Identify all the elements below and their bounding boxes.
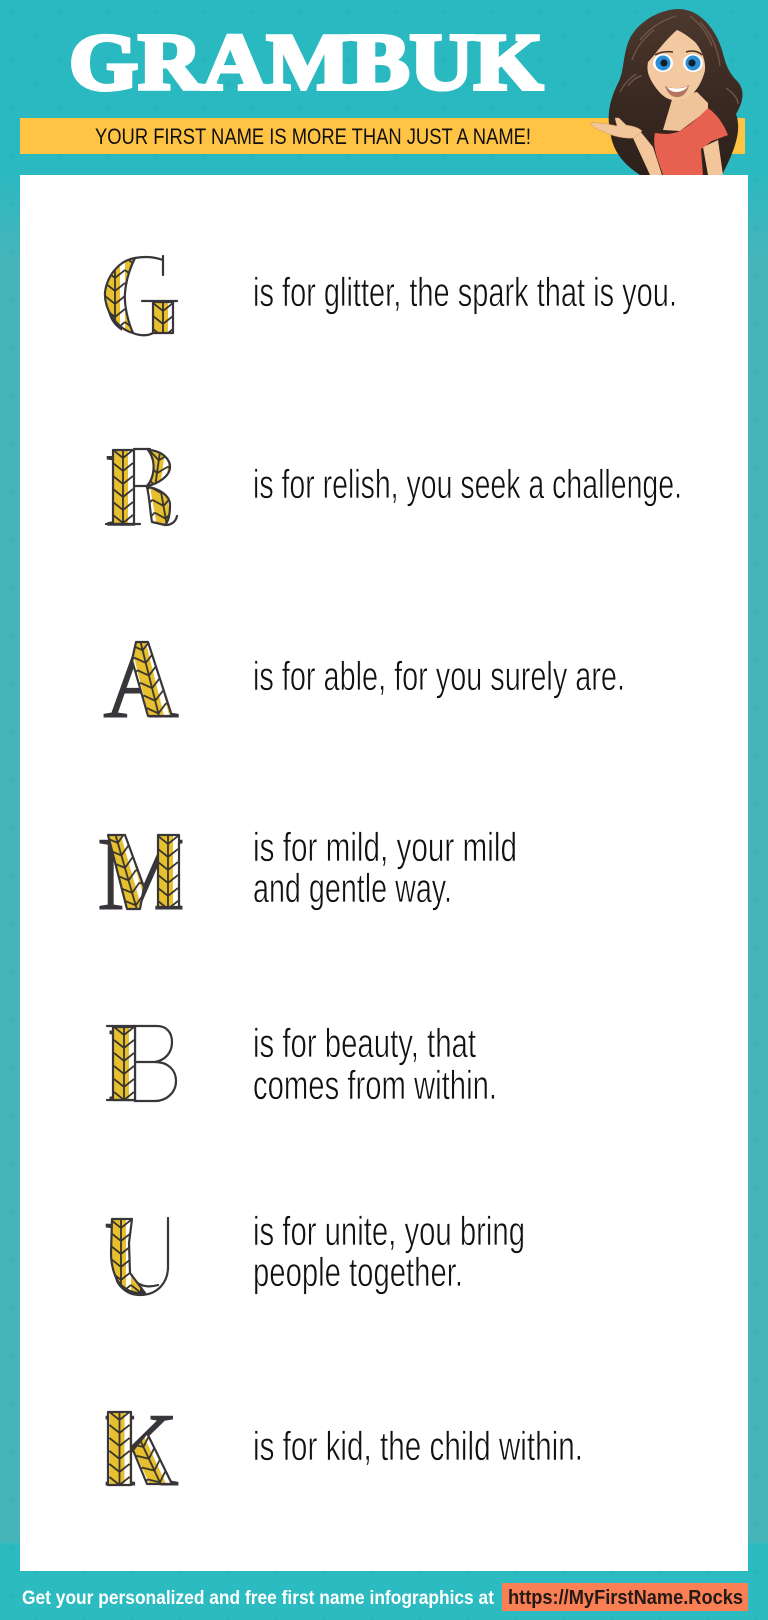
- text: people together.: [253, 1249, 463, 1295]
- row K: [103, 1391, 583, 1508]
- text: is for unite, you bring: [253, 1208, 525, 1254]
- text: [253, 1208, 525, 1295]
- letter U: U: [104, 1199, 177, 1316]
- title: GRAMBUK: [69, 19, 543, 107]
- row G: [103, 240, 677, 357]
- text: and gentle way.: [253, 865, 452, 911]
- letter A: A: [103, 623, 179, 740]
- tagline: YOUR FIRST NAME IS MORE THAN JUST A NAME!: [95, 124, 531, 149]
- letter K: K: [103, 1391, 179, 1508]
- text: comes from within.: [253, 1062, 497, 1108]
- row R: [104, 431, 682, 548]
- letter R: R: [104, 431, 178, 548]
- text: [253, 824, 517, 911]
- text: is for kid, the child within.: [253, 1423, 583, 1469]
- letter B: B: [107, 1006, 175, 1123]
- text: is for mild, your mild: [253, 824, 517, 870]
- text: is for able, for you surely are.: [253, 653, 625, 699]
- row A: [103, 623, 625, 740]
- yellow banner: [20, 118, 745, 154]
- footer url badge: https://MyFirstName.Rocks: [508, 1587, 743, 1609]
- letter G: G: [103, 240, 177, 357]
- text: is for beauty, that: [253, 1020, 476, 1066]
- letter M: M: [97, 815, 185, 932]
- row M: [97, 815, 517, 932]
- row B: [107, 1006, 497, 1123]
- row U: [104, 1199, 525, 1316]
- text: [253, 1020, 497, 1108]
- footer text: Get your personalized and free first name infographics at: [22, 1588, 495, 1609]
- illustration: smiling woman: [590, 9, 742, 175]
